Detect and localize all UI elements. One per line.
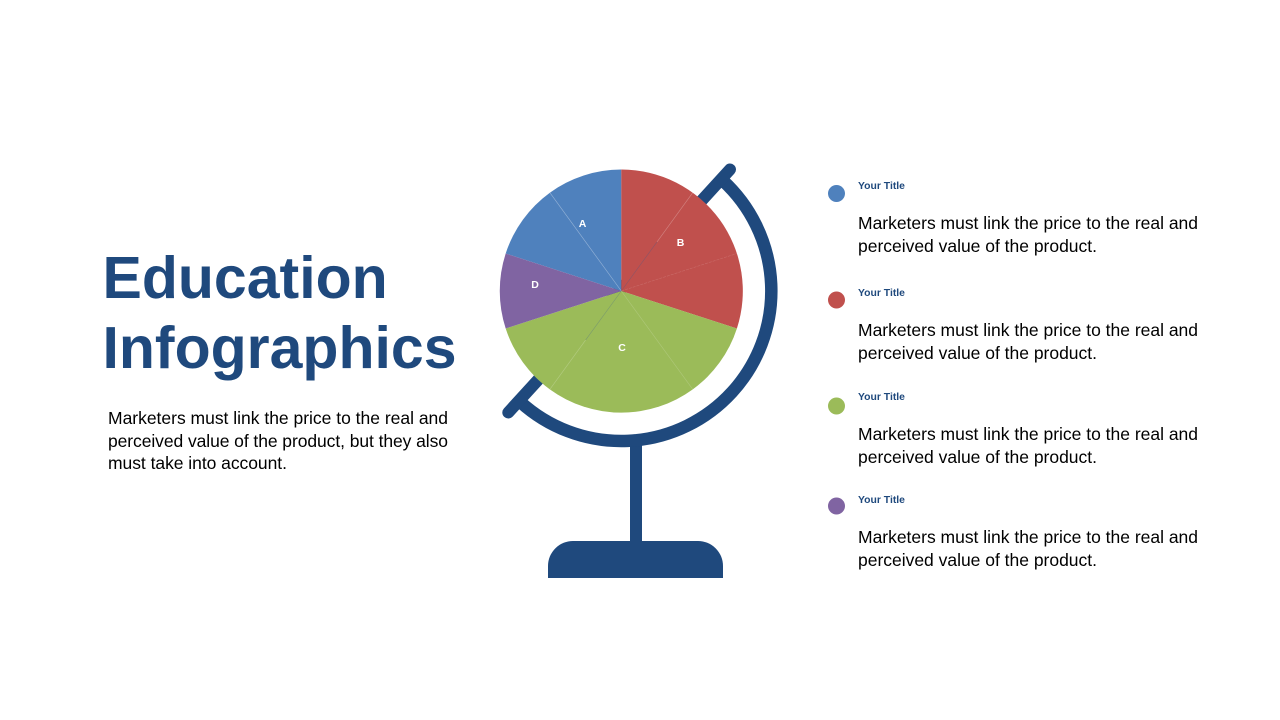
item text: perceived value of the product.	[858, 447, 1097, 467]
globe stand base	[548, 541, 723, 578]
slice B red	[621, 169, 743, 328]
globe axis	[508, 170, 730, 412]
item title: Your Title	[858, 392, 905, 403]
intro text block: must take into account.	[108, 453, 287, 473]
intro text block	[108, 408, 448, 473]
pie chart	[500, 169, 743, 413]
slice C green	[506, 291, 737, 413]
item title: Your Title	[858, 288, 905, 299]
icon: blue dot	[828, 185, 845, 202]
legend item: red	[828, 288, 1198, 363]
globe illustration	[500, 169, 771, 578]
item text: Marketers must link the price to the real and	[858, 424, 1198, 444]
label B: B	[677, 237, 685, 249]
label C: C	[618, 342, 626, 354]
legend item: green	[828, 392, 1198, 467]
title: Infographics	[102, 315, 457, 381]
item text: perceived value of the product.	[858, 550, 1097, 570]
item title: Your Title	[858, 181, 905, 192]
legend item: purple	[828, 495, 1198, 570]
slice D purple	[500, 254, 621, 328]
item text: Marketers must link the price to the real and	[858, 527, 1198, 547]
intro text block: perceived value of the product, but they also	[108, 431, 448, 451]
label A: A	[579, 218, 587, 230]
item text: Marketers must link the price to the real and	[858, 320, 1198, 340]
item text: perceived value of the product.	[858, 343, 1097, 363]
icon: purple dot	[828, 498, 845, 514]
globe meridian ring	[520, 180, 771, 441]
intro text block: Marketers must link the price to the real and	[108, 408, 448, 428]
item title: Your Title	[858, 495, 905, 506]
icon: red dot	[828, 292, 845, 308]
item text: Marketers must link the price to the real and	[858, 213, 1198, 233]
item text: perceived value of the product.	[858, 236, 1097, 256]
title	[102, 245, 457, 381]
label D: D	[531, 279, 539, 291]
legend item: blue	[828, 181, 1198, 256]
globe stand pole	[630, 440, 642, 542]
title: Education	[102, 245, 388, 311]
icon: green dot	[828, 398, 845, 414]
slice A blue	[506, 169, 621, 291]
